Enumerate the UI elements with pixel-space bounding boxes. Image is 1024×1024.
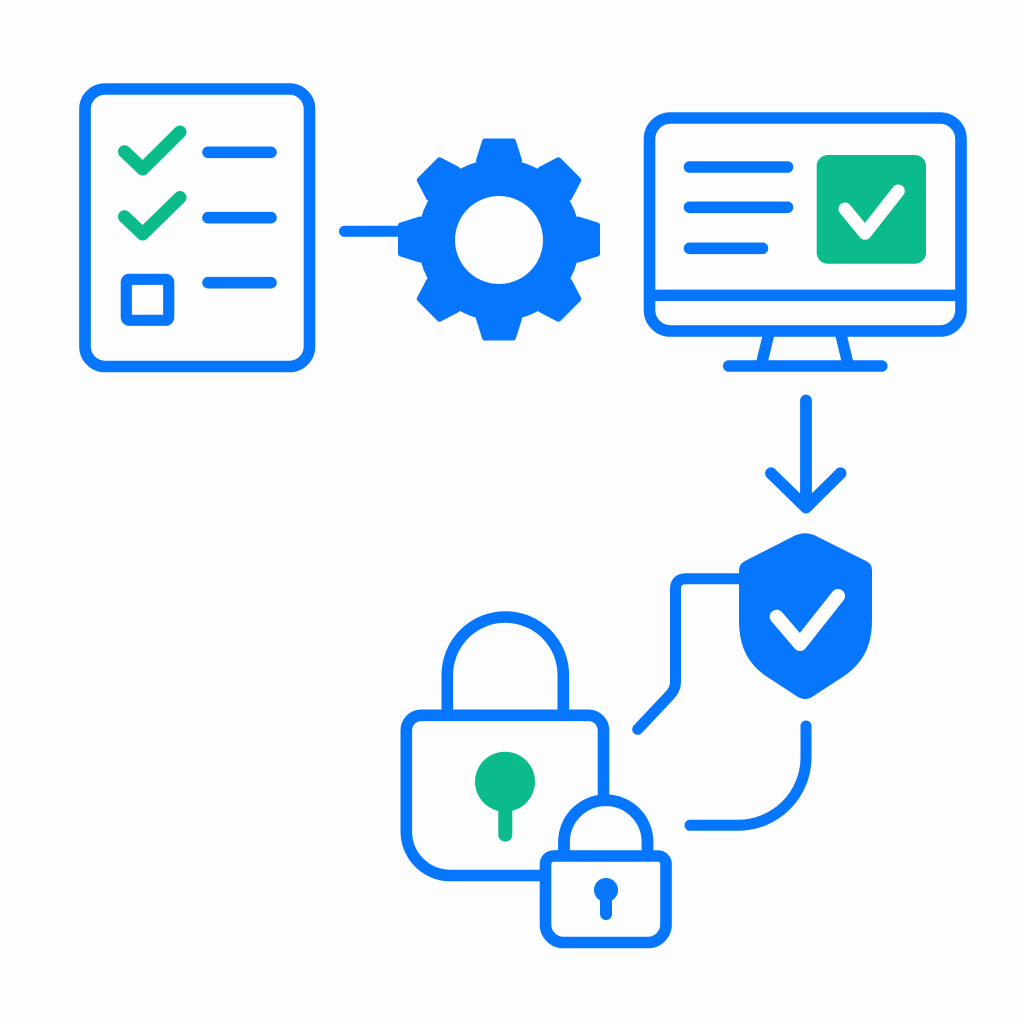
small padlock shackle xyxy=(564,800,648,856)
green check panel xyxy=(817,155,926,264)
gear teeth xyxy=(401,142,597,338)
connector: shield to padlock stepped xyxy=(638,579,742,729)
green keyhole xyxy=(475,752,535,835)
connector: checklist to gear xyxy=(344,226,410,237)
small padlock body xyxy=(546,856,666,942)
screen text lines xyxy=(690,167,788,248)
icon: gear xyxy=(401,142,597,338)
arrow: monitor to shield xyxy=(771,400,840,508)
large padlock shackle xyxy=(447,617,563,715)
second checkmark xyxy=(124,198,180,234)
icon: small padlock xyxy=(546,800,666,942)
gear ring xyxy=(436,178,562,302)
white checkmark xyxy=(845,191,898,233)
empty checkbox xyxy=(126,279,169,320)
second list line xyxy=(208,212,271,223)
monitor base xyxy=(729,360,882,372)
document outline xyxy=(85,89,310,366)
first list line xyxy=(208,147,271,158)
large padlock body xyxy=(406,715,604,876)
icon: shield xyxy=(739,533,872,699)
monitor screen outline xyxy=(650,118,961,331)
monitor stand xyxy=(761,335,848,366)
shield checkmark xyxy=(777,596,838,644)
third list line xyxy=(208,277,271,289)
icon: checklist document xyxy=(85,89,310,366)
connector: shield to padlock curved xyxy=(690,726,806,825)
icon: monitor xyxy=(650,118,961,366)
first checkmark xyxy=(124,132,180,169)
shield body xyxy=(739,533,872,699)
icon: large padlock xyxy=(406,617,604,876)
monitor bezel line xyxy=(650,290,961,301)
small keyhole xyxy=(594,878,618,914)
